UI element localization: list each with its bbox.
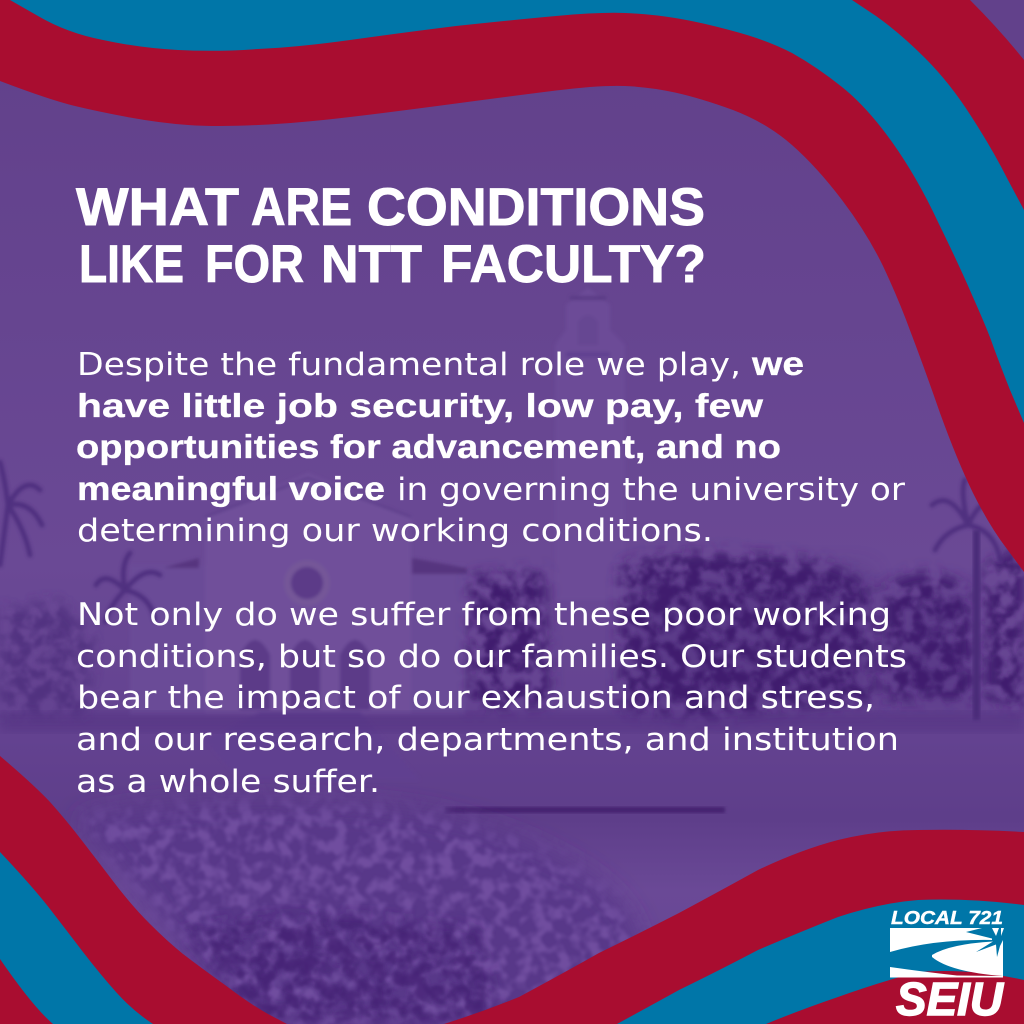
paragraph: impact on families and students: as a whole suffer. — [76, 764, 380, 800]
wave: bottom left teal band — [0, 852, 153, 1024]
logo: SEIU Local 721 — [890, 908, 1005, 1024]
paragraph: impact on families and students: bear the impact of our exhaustion and stress, — [77, 680, 875, 716]
title: WHAT — [76, 178, 239, 237]
paragraph: impact on families and students: conditions, but so do our families. Our students — [76, 639, 907, 675]
paragraph: job conditions: have little job security, low pay, few — [77, 387, 763, 424]
paragraph: job conditions: meaningful voice — [77, 470, 385, 507]
wave: top teal band — [10, 0, 1024, 423]
top right purple corner — [970, 0, 1024, 60]
wave: bottom left red band — [0, 756, 287, 1024]
photo: trees and palms — [0, 462, 1024, 732]
paragraph: job conditions: determining our working conditions. — [77, 513, 713, 549]
wave: bottom right red band — [444, 830, 1024, 1024]
paragraph: job conditions — [76, 345, 905, 549]
title: FOR — [205, 235, 304, 294]
title: NTT — [321, 235, 422, 294]
title: FACULTY? — [441, 235, 706, 294]
wave: bottom right teal band — [617, 900, 1024, 1024]
paragraph: job conditions: Despite the fundamental role we play, — [77, 347, 741, 383]
paragraph: impact on families and students: and our research, departments, and institution — [76, 722, 899, 758]
title: LIKE — [79, 235, 184, 294]
photo: bell tower — [555, 288, 625, 600]
paragraph: job conditions: in governing the university or — [397, 472, 905, 508]
title — [76, 178, 706, 294]
wave: top red band — [0, 0, 1024, 572]
logo: SEIU Local 721: LOCAL 721 — [891, 908, 1003, 928]
paragraph: impact on families and students: Not only do we suffer from these poor working — [77, 597, 891, 633]
photo: lawn and flower bed — [80, 802, 725, 1024]
logo: SEIU Local 721: SEIU — [896, 973, 1005, 1024]
wave: top corner red band — [852, 0, 1024, 210]
paragraph: job conditions: opportunities for advancement, and no — [76, 428, 781, 465]
title: CONDITIONS — [367, 178, 705, 237]
paragraph: job conditions: we — [751, 345, 804, 382]
title: ARE — [251, 178, 352, 237]
photo: chapel building — [130, 473, 467, 780]
wave: bottom left corner red — [0, 959, 53, 1024]
paragraph: impact on families and students — [76, 597, 907, 800]
logo emblem: sunrise and road — [890, 928, 1004, 978]
